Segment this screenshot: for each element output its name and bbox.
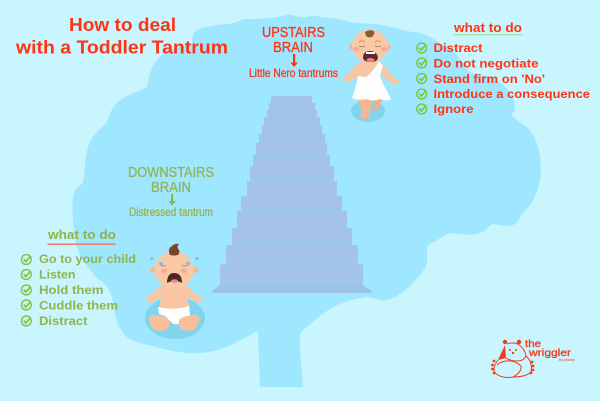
title: How to deal [69, 15, 176, 35]
wordmark: wriggler [528, 347, 572, 359]
upstairs brain label: Little Nero tantrums [249, 66, 338, 80]
downstairs brain label: DOWNSTAIRS [128, 165, 214, 181]
brain silhouette [72, 15, 541, 387]
upstairs brain label [249, 25, 338, 80]
downstairs brain label: Distressed tantrum [129, 205, 213, 219]
checklist: Distract [39, 314, 88, 328]
checklist: Introduce a consequence [434, 87, 590, 101]
checklist: Hold them [39, 283, 104, 297]
wordmark [525, 338, 575, 362]
downstairs brain label: BRAIN [151, 180, 191, 196]
what to do: downstairs [21, 228, 136, 328]
staircase [212, 96, 372, 293]
checklist [417, 41, 590, 116]
checklist: Listen [39, 268, 76, 282]
checklist: Distract [434, 41, 482, 55]
wordmark: by plushy [559, 358, 575, 362]
checklist: Cuddle them [39, 298, 118, 312]
baby: upstairs, toga [343, 30, 400, 122]
logo: the wriggler [491, 338, 575, 378]
upstairs brain label: BRAIN [273, 40, 313, 56]
checklist: Stand firm on 'No' [434, 72, 545, 86]
title: with a Toddler Tantrum [15, 38, 228, 58]
checklist: Go to your child [39, 252, 136, 266]
checklist [21, 252, 136, 328]
checklist: Ignore [434, 102, 474, 116]
heading: what to do: what to do [453, 21, 522, 35]
checklist: Do not negotiate [434, 56, 539, 70]
baby: downstairs, diaper [145, 244, 205, 339]
what to do: upstairs [417, 21, 590, 116]
icon: bear [491, 340, 534, 378]
heading: what to do: what to do [47, 228, 116, 242]
upstairs brain label: UPSTAIRS [262, 25, 325, 41]
wordmark: the [525, 338, 541, 350]
downstairs brain label [128, 165, 214, 219]
title [15, 15, 228, 58]
